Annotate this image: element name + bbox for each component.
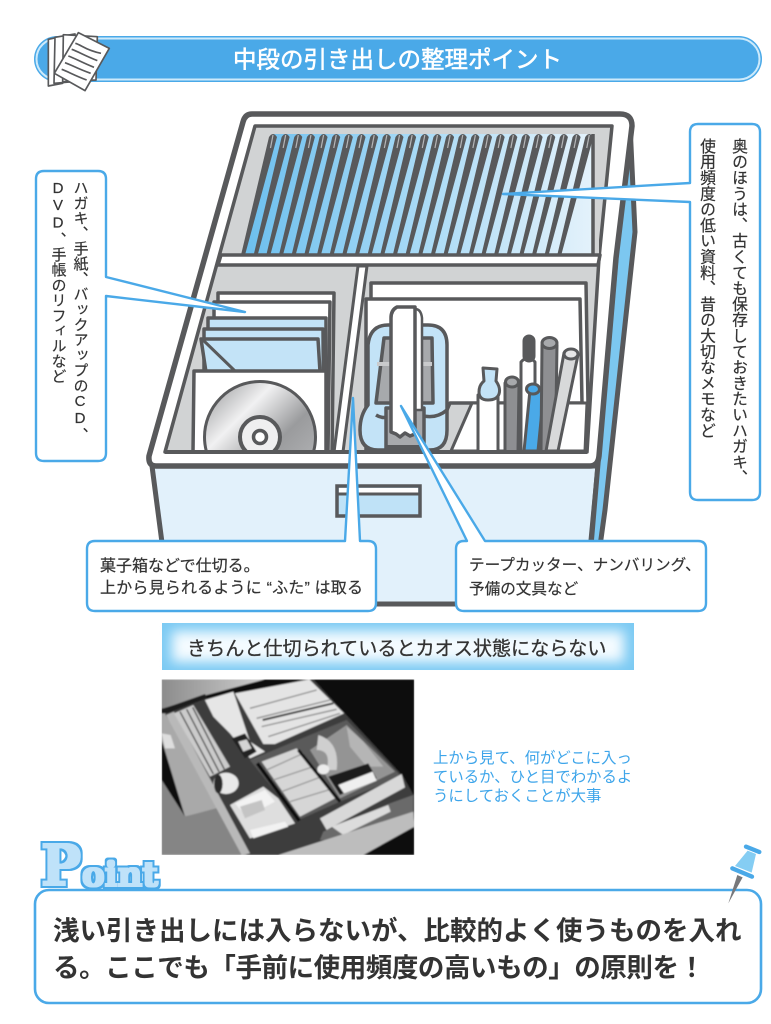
callout: right, old documents bbox=[503, 124, 760, 500]
Point heading: oint bbox=[82, 855, 158, 895]
Point heading: P bbox=[41, 833, 81, 899]
icon: push pin bbox=[728, 847, 759, 903]
glue bbox=[478, 395, 498, 451]
subheading banner bbox=[162, 623, 634, 670]
callout: bottom left, partition boxes: 菓子箱などで仕切る。 bbox=[100, 557, 260, 575]
tape dispenser bbox=[360, 307, 447, 451]
callout: bottom right, stationery: テープカッター、ナンバリング、 bbox=[469, 556, 701, 574]
drawer floor line bbox=[165, 450, 587, 454]
callout: bottom right, stationery: 予備の文具など bbox=[469, 580, 579, 598]
left compartment: cards and CD bbox=[191, 291, 336, 450]
Point heading bbox=[41, 833, 158, 899]
handle bbox=[337, 486, 420, 516]
photo: organized drawer bbox=[162, 679, 414, 855]
callout: bottom left, partition boxes: 上から見られるように “ふた” は取る bbox=[100, 579, 363, 597]
callout: right, old documents: 奥のほうは、古くても保存しておきたいハガキ、 bbox=[730, 138, 747, 486]
callout: right, old documents: 使用頻度の低い資料、昔の大切なメモなど bbox=[698, 138, 715, 438]
subheading banner: きちんと仕切られているとカオス状態にならない bbox=[187, 638, 606, 660]
callout: bottom left, partition boxes bbox=[87, 398, 376, 611]
marker bbox=[521, 358, 535, 451]
key point text: る。ここでも「手前に使用頻度の高いもの」の原則を！ bbox=[53, 953, 705, 983]
callout: bottom right, stationery bbox=[401, 406, 706, 611]
right compartment: papers bbox=[366, 283, 588, 450]
title: 中段の引き出しの整理ポイント bbox=[233, 46, 562, 72]
icon: stack of papers bbox=[48, 33, 109, 91]
blue pen bbox=[524, 390, 544, 451]
panel: key point bbox=[35, 890, 761, 1003]
header banner bbox=[34, 33, 762, 91]
key point text: 浅い引き出しには入らないが、比較的よく使うものを入れ bbox=[53, 916, 741, 946]
divider bbox=[334, 266, 367, 452]
tall gray pen bbox=[541, 340, 557, 451]
icon: CD bbox=[203, 380, 317, 450]
callout: left, postcards and discs: DVD、手帳のリフィルなど bbox=[50, 180, 66, 384]
photo caption: うにしておくことが大事 bbox=[433, 787, 601, 805]
photo caption: ているか、ひと目でわかるよ bbox=[433, 768, 632, 786]
key point text bbox=[53, 916, 741, 983]
light gray pen bbox=[546, 353, 578, 451]
partition band bbox=[218, 255, 600, 265]
gray pen bbox=[505, 379, 519, 451]
drawer illustration bbox=[149, 114, 635, 604]
photo caption: 上から見て、何がどこに入っ bbox=[433, 749, 632, 767]
callout: left, postcards and discs bbox=[36, 171, 245, 461]
photo caption bbox=[433, 749, 632, 805]
callout: left, postcards and discs: ハガキ、手紙、バックアップのCD、 bbox=[72, 180, 88, 442]
drawer body bbox=[149, 114, 635, 604]
pen holder bbox=[451, 336, 587, 451]
hanging files bbox=[241, 132, 599, 255]
